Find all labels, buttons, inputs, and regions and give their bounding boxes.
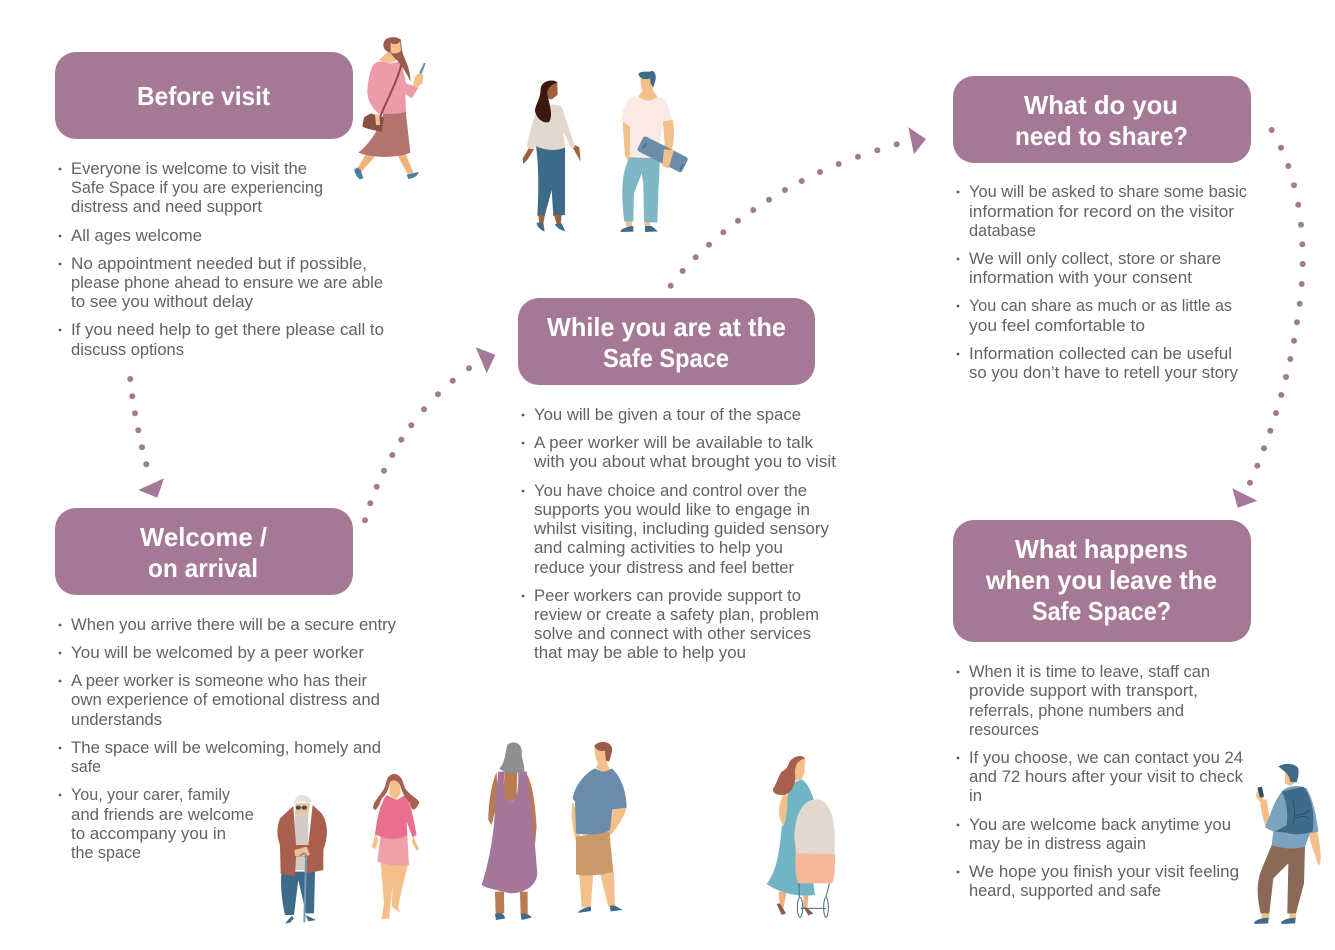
text block: share bullets: We will only collect, store or share (969, 250, 1221, 268)
text block: before visit bullets: If you need help to get there please call to (71, 321, 384, 339)
heading: what happens when you leave: Safe Space? (1032, 596, 1171, 626)
text block: safe space bullets: whilst visiting, including guided sensory (533, 520, 830, 538)
text block: leaving bullets: referrals, phone numbers and (969, 702, 1184, 720)
text block: leaving bullets: in (969, 787, 982, 805)
icon: group of four people (277, 742, 627, 923)
text block: safe space bullets: that may be able to help you (534, 644, 746, 662)
text block: share bullets: information for record on the visitor (969, 203, 1235, 221)
text block: safe space bullets: A peer worker will be available to talk (534, 434, 814, 452)
heading: before visit (55, 52, 353, 139)
heading: welcome on arrival (55, 508, 353, 595)
text block: leaving bullets: heard, supported and safe (969, 882, 1161, 900)
panel: what do you need to share (953, 76, 1251, 382)
text block: welcome bullets: You will be welcomed by a peer worker (71, 644, 365, 662)
text block: safe space bullets: solve and connect with other services (534, 625, 811, 643)
text block: leaving bullets: You are welcome back anytime you (969, 816, 1231, 834)
text block: leaving bullets: may be in distress again (969, 835, 1146, 853)
text block: leaving bullets: provide support with transport, (969, 682, 1198, 700)
text block: safe space bullets: and calming activities to help you (534, 539, 783, 557)
text block: share bullets: Information collected can be useful (969, 345, 1232, 363)
text block: safe space bullets: Peer workers can provide support to (534, 587, 801, 605)
heading: what happens when you leave (953, 520, 1251, 642)
icon: dark haired woman standing (523, 71, 689, 232)
text block: before visit bullets: Everyone is welcome to visit the (71, 160, 307, 178)
arrow: before visit to welcome (127, 376, 164, 498)
heading: welcome on arrival: Welcome / (140, 522, 267, 552)
icon: woman in purple dress (482, 742, 537, 920)
text block: before visit bullets: No appointment needed but if possible, (71, 255, 367, 273)
text block: share bullets: You can share as much or as little as (969, 297, 1232, 315)
text block: safe space bullets: with you about what brought you to visit (533, 453, 836, 471)
heading: what do you need to share: What do you (1024, 90, 1178, 120)
text block: safe space bullets: You have choice and control over the (534, 482, 807, 500)
heading: what happens when you leave: What happens (1015, 534, 1188, 564)
text block: before visit bullets: All ages welcome (71, 227, 202, 245)
text block: before visit bullets: Safe Space if you are experiencing (71, 179, 323, 197)
heading: what do you need to share: need to share? (1015, 121, 1188, 151)
heading: welcome on arrival: on arrival (148, 553, 258, 583)
text block: before visit bullets: to see you without delay (71, 293, 254, 311)
text block: welcome bullets: You, your carer, family (71, 786, 231, 804)
text block: welcome bullets: The space will be welcoming, homely and (71, 739, 381, 757)
text block: share bullets: you feel comfortable to (969, 317, 1145, 335)
heading: what do you need to share (953, 76, 1251, 163)
text block: safe space bullets: review or create a safety plan, problem (534, 606, 819, 624)
icon: woman with phone and bag (354, 37, 426, 179)
text block: leaving bullets (957, 663, 1244, 900)
text block: welcome bullets: safe (71, 758, 101, 776)
text block: leaving bullets: We hope you finish your visit feeling (969, 863, 1239, 881)
text block: leaving bullets: resources (969, 721, 1039, 739)
text block: welcome bullets (59, 616, 397, 862)
heading: while you are at the safe space (518, 298, 815, 385)
text block: safe space bullets (522, 406, 836, 662)
text block: before visit bullets: please phone ahead to ensure we are able (71, 274, 383, 292)
text block: share bullets: information with your consent (969, 269, 1192, 287)
heading: while you are at the safe space: While you are at the (547, 312, 786, 342)
text block: welcome bullets: to accompany you in (71, 825, 226, 843)
text block: welcome bullets: When you arrive there will be a secure entry (71, 616, 397, 634)
panel: before visit (55, 52, 384, 359)
icon: elderly man with cane (277, 795, 327, 923)
text block: welcome bullets: and friends are welcome (71, 806, 254, 824)
panel: while you are at the safe space (518, 298, 836, 662)
text block: safe space bullets: You will be given a tour of the space (534, 406, 801, 424)
text block: welcome bullets: own experience of emotional distress and (71, 691, 380, 709)
panel: welcome on arrival (55, 508, 397, 862)
text block: share bullets: You will be asked to share some basic (969, 183, 1247, 201)
icon: woman in pink (372, 774, 419, 919)
heading: what happens when you leave: when you leave the (985, 565, 1217, 595)
text block: leaving bullets: and 72 hours after your visit to check (969, 768, 1244, 786)
arrow: welcome to safe space (362, 347, 495, 523)
heading: before visit: Before visit (137, 81, 270, 111)
heading: while you are at the safe space: Safe Space (603, 343, 729, 373)
arrow: safe space to share (668, 127, 926, 289)
text block: safe space bullets: supports you would like to engage in (534, 501, 810, 519)
icon: man in blue tee and shorts (572, 742, 627, 913)
icon: woman with pram (767, 756, 835, 917)
panel: what happens when you leave (953, 520, 1251, 900)
text block: before visit bullets (59, 160, 384, 359)
text block: safe space bullets: reduce your distress and feel better (534, 559, 794, 577)
text block: leaving bullets: When it is time to leave, staff can (969, 663, 1210, 681)
text block: share bullets: database (969, 222, 1036, 240)
icon: man with backpack and phone (1254, 764, 1321, 924)
text block: share bullets: so you don’t have to retell your story (969, 364, 1239, 382)
arrow: share to leaving (1232, 127, 1306, 508)
text block: welcome bullets: the space (71, 844, 141, 862)
text block: welcome bullets: A peer worker is someone who has their (71, 672, 368, 690)
text block: welcome bullets: understands (71, 711, 162, 729)
text block: before visit bullets: discuss options (71, 341, 184, 359)
text block: share bullets (957, 183, 1247, 382)
text block: leaving bullets: If you choose, we can contact you 24 (969, 749, 1243, 767)
text block: before visit bullets: distress and need support (71, 198, 262, 216)
